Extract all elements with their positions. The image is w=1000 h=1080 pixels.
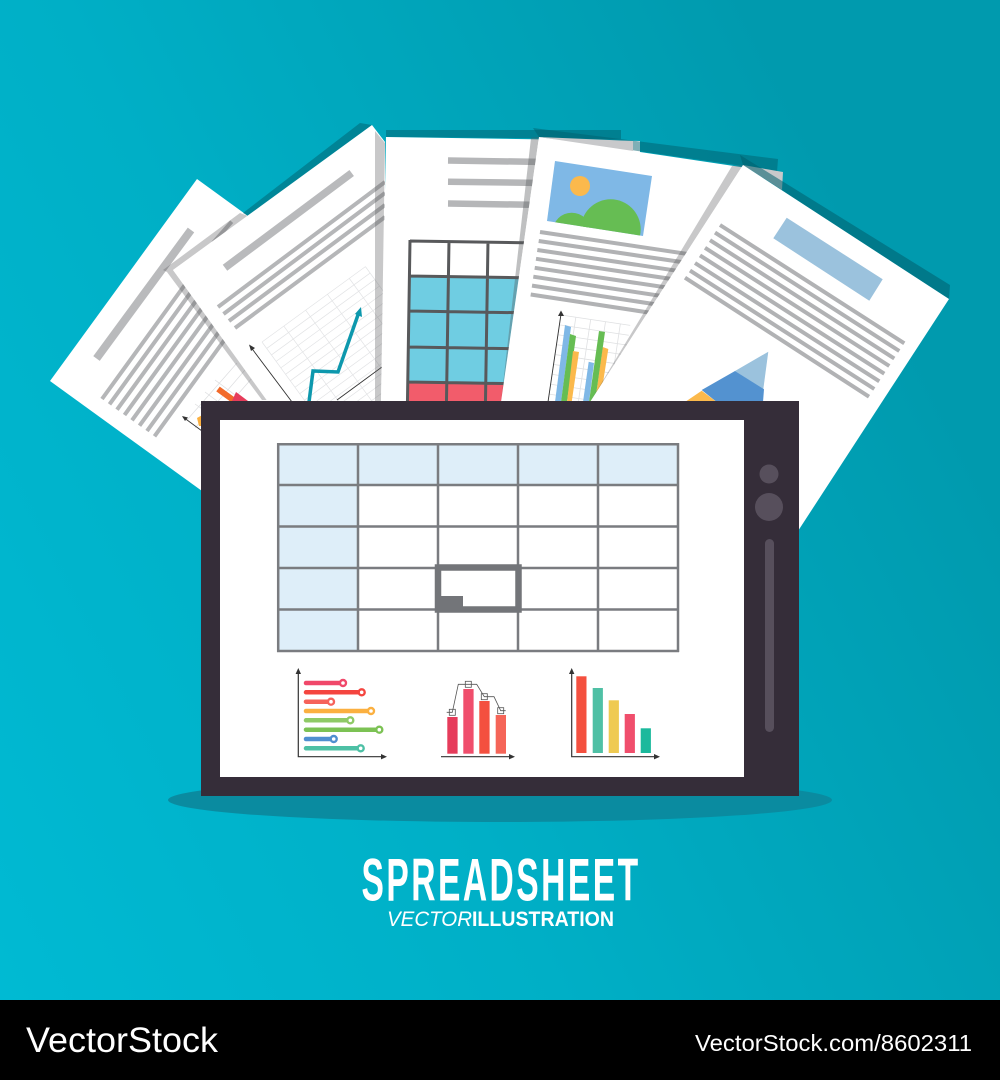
- paper 2 grid: [262, 267, 446, 452]
- subtitle: ILLUSTRATION: [472, 907, 614, 931]
- selected cell: [438, 568, 518, 610]
- tablet device: [201, 401, 799, 796]
- device shadow: [168, 778, 832, 822]
- paper 5 title block: [773, 218, 883, 301]
- tablet buttons: [755, 464, 783, 732]
- paper 4: image document: [501, 137, 744, 414]
- paper 1 chart: [182, 363, 255, 434]
- subtitle: VECTOR: [387, 907, 472, 931]
- subtitle: [387, 907, 614, 931]
- footer url: VectorStock.com/8602311: [695, 1030, 972, 1056]
- paper 5 shadows: [590, 155, 950, 402]
- paper 4 text lines: [531, 232, 700, 315]
- paper 2 shadows: [163, 123, 372, 400]
- title: SPREADSHEET: [362, 848, 638, 914]
- paper 1 text lines: [102, 222, 244, 436]
- paper 4 shadows: [501, 128, 783, 402]
- paper 2 axes: [249, 344, 382, 402]
- chart: bars with line: [441, 681, 515, 759]
- paper 2: chart document: [173, 125, 446, 452]
- chart: descending bars: [569, 668, 660, 759]
- spreadsheet table: [277, 443, 679, 652]
- paper 2 teal trend arrow: [309, 307, 362, 402]
- paper 3 text lines: [448, 160, 545, 205]
- paper 3 top shadow: [386, 130, 621, 139]
- paper 5: right document: [590, 165, 949, 540]
- paper 2 right fold shadow: [375, 131, 385, 402]
- footer logo: VectorStock: [26, 1021, 219, 1060]
- paper 1: left document: [50, 179, 350, 491]
- paper 3 table: [407, 240, 530, 406]
- paper 4 bar chart: [548, 310, 630, 414]
- chart: horizontal lollipop bars: [296, 668, 387, 759]
- footer bar: [0, 1000, 1000, 1080]
- paper 5 pyramid chart: [685, 352, 768, 402]
- paper 3: table document: [381, 137, 640, 406]
- tablet screen: [220, 420, 744, 777]
- paper 4 picture: [547, 161, 652, 236]
- paper 5 text lines: [685, 225, 904, 397]
- paper 2 text lines: [218, 182, 385, 328]
